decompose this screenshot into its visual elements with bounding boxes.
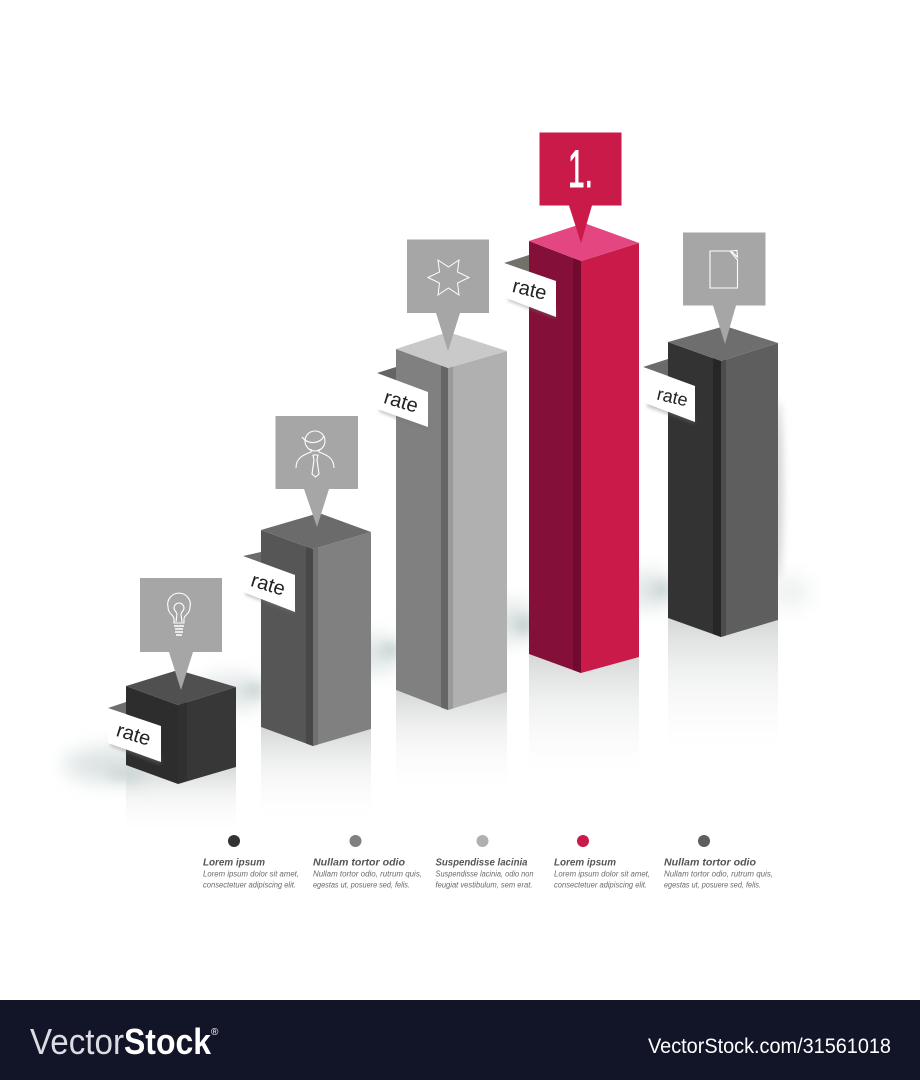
legend item 1: Lorem ipsum [203, 858, 265, 868]
footer logo: Stock [124, 1021, 212, 1062]
icon: document [710, 250, 738, 288]
rate label 1 [108, 702, 161, 765]
icon: light bulb [168, 593, 190, 635]
footer bar [0, 1000, 920, 1080]
footer logo: ® [211, 1027, 219, 1038]
rate label 5 [643, 359, 695, 424]
rate label 4 [504, 255, 556, 319]
legend item 2: egestas ut, posuere sed, felis. [313, 880, 410, 890]
legend item 4: Lorem ipsum [554, 858, 616, 868]
rate label 2 [243, 552, 295, 614]
icon: six-point star [428, 260, 469, 295]
bar 3: light grey [396, 332, 507, 710]
footer logo [30, 1021, 219, 1062]
legend item 5: Nullam tortor odio [664, 858, 756, 868]
number: 1. [568, 140, 593, 199]
footer logo: Vector [30, 1021, 124, 1062]
rate label 2: rate [248, 569, 288, 601]
callout 2: person with tie [276, 416, 358, 527]
footer url: VectorStock.com/31561018 [648, 1035, 891, 1058]
legend item 5: Nullam tortor odio, rutrum quis, [664, 870, 773, 878]
legend item 2: Nullam tortor odio, rutrum quis, [313, 870, 422, 878]
callout 3: star [407, 240, 489, 351]
legend item 2: Nullam tortor odio [313, 858, 405, 868]
legend item 1: consectetuer adipiscing elit. [203, 880, 296, 890]
legend item 3 [436, 835, 534, 890]
bar 4: crimson [529, 223, 639, 673]
callout 4: number one [540, 132, 622, 243]
legend item 3: Suspendisse lacinia, odio non [436, 870, 534, 878]
floor reflections and shadows [64, 400, 810, 835]
legend item 5: egestas ut, posuere sed, felis. [664, 880, 761, 890]
legend item 3: Suspendisse lacinia [436, 858, 528, 868]
bar 1: dark cube [126, 670, 236, 784]
legend item 4: consectetuer adipiscing elit. [554, 880, 647, 890]
legend item 5 [664, 835, 773, 890]
icon: person [296, 431, 334, 477]
legend item 2 [313, 835, 422, 890]
legend item 4 [554, 835, 650, 890]
legend item 1: Lorem ipsum dolor sit amet, [203, 870, 299, 878]
rate label 3: rate [381, 386, 421, 418]
legend item 1 [203, 835, 299, 890]
callout 5: document [683, 232, 766, 344]
legend item 4: Lorem ipsum dolor sit amet, [554, 870, 650, 878]
rate label 4: rate [510, 275, 549, 305]
legend item 3: feugiat vestibulum, sem erat. [436, 880, 532, 890]
callout 1: light bulb [140, 578, 222, 690]
bar 5: charcoal [668, 326, 778, 637]
rate label 5: rate [655, 384, 690, 410]
rate label 3 [377, 367, 428, 430]
bar 2: medium grey [261, 513, 371, 746]
rate label 1: rate [114, 719, 153, 751]
